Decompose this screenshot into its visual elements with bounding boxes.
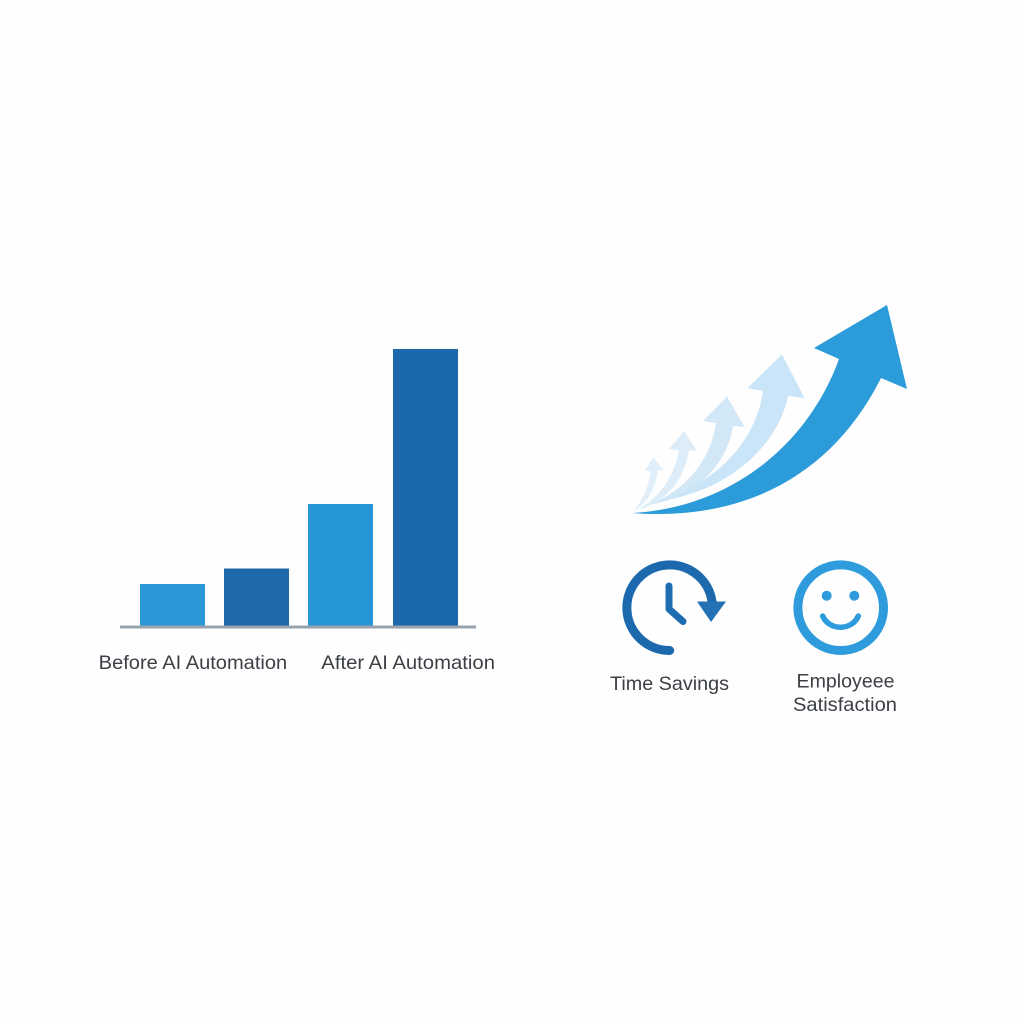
clock ring — [627, 565, 712, 650]
icon: clock — [627, 565, 726, 650]
smiley ring — [798, 565, 884, 650]
clock hands — [669, 586, 683, 622]
left eye — [822, 591, 832, 601]
clock arrow head — [697, 602, 726, 622]
right eye — [849, 591, 859, 601]
label: before: Before AI Automation — [99, 652, 287, 674]
arrow: faint small 2 — [637, 431, 697, 510]
arrow: faint medium — [648, 396, 744, 505]
bar chart — [99, 349, 495, 674]
bar: after 1 — [308, 504, 373, 627]
label: employee satisfaction — [793, 670, 897, 716]
chart baseline — [120, 626, 476, 628]
arrow: faint large — [655, 354, 804, 502]
label line 2: Satisfaction — [793, 694, 897, 716]
icon: smiley — [798, 565, 884, 650]
growth arrows — [632, 305, 907, 514]
label: after: After AI Automation — [321, 652, 495, 674]
label line 1: Employeee — [796, 670, 894, 692]
arrow: faint small 1 — [634, 457, 664, 511]
bar: before 1 — [140, 584, 205, 627]
bar: before 2 — [224, 568, 289, 627]
label: time savings: Time Savings — [610, 673, 729, 695]
bar: after 2 — [393, 349, 458, 627]
smile — [823, 616, 858, 627]
arrow: main — [632, 305, 907, 514]
